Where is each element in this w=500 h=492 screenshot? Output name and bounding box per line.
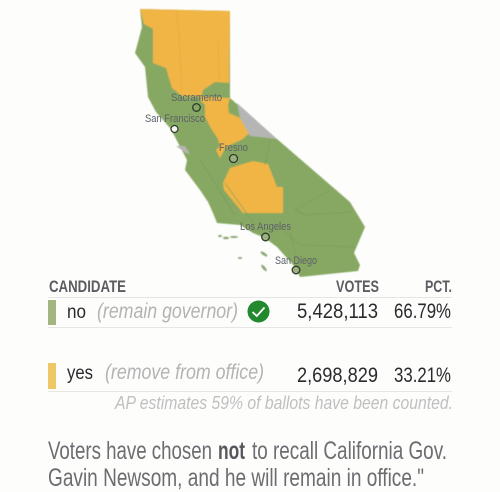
table header: PCT.	[425, 277, 452, 296]
footnote: AP estimates 59% of ballots have been counted.	[114, 393, 453, 413]
statement: Voters have chosen	[48, 437, 212, 465]
gray region: eastern counties	[237, 103, 277, 139]
city marker and label: San Diego: San Diego	[275, 255, 317, 267]
row: yes: 33.21%	[394, 364, 451, 387]
row: yes: (remove from office)	[105, 361, 264, 384]
row: no: no	[67, 302, 86, 323]
results table	[48, 277, 453, 413]
row: no: (remain governor)	[97, 300, 238, 323]
table header: CANDIDATE	[49, 277, 126, 296]
row: no	[48, 300, 451, 325]
table header: VOTES	[336, 277, 379, 296]
statement	[48, 437, 447, 492]
statement: not	[218, 437, 245, 465]
city marker and label: Los Angeles	[240, 221, 291, 241]
table header	[49, 277, 452, 296]
row: yes: 2,698,829	[297, 364, 378, 387]
yellow region: south	[223, 161, 283, 213]
row: no: 66.79%	[394, 300, 451, 323]
map of California by county result	[135, 9, 365, 277]
county lines	[176, 11, 219, 90]
gray region: bay area	[176, 146, 190, 154]
city marker and label: Sacramento	[171, 92, 222, 111]
row: yes	[48, 361, 451, 389]
state base: green counties	[135, 9, 365, 277]
yellow region: north	[140, 9, 250, 139]
yellow region: central valley	[215, 130, 250, 158]
icon: winner check mark	[248, 300, 270, 322]
city marker and label: Los Angeles: Los Angeles	[240, 221, 291, 233]
row: no: 5,428,113	[297, 300, 378, 323]
city marker and label: San Francisco	[145, 113, 205, 132]
row: yes: yes	[67, 363, 93, 384]
city marker and label: San Diego	[275, 255, 317, 274]
city marker and label: Fresno: Fresno	[219, 142, 248, 154]
city marker and label: Fresno	[219, 142, 248, 162]
city marker and label: San Francisco: San Francisco	[145, 113, 205, 125]
channel islands	[218, 235, 268, 272]
city marker and label: Sacramento: Sacramento	[171, 92, 222, 104]
